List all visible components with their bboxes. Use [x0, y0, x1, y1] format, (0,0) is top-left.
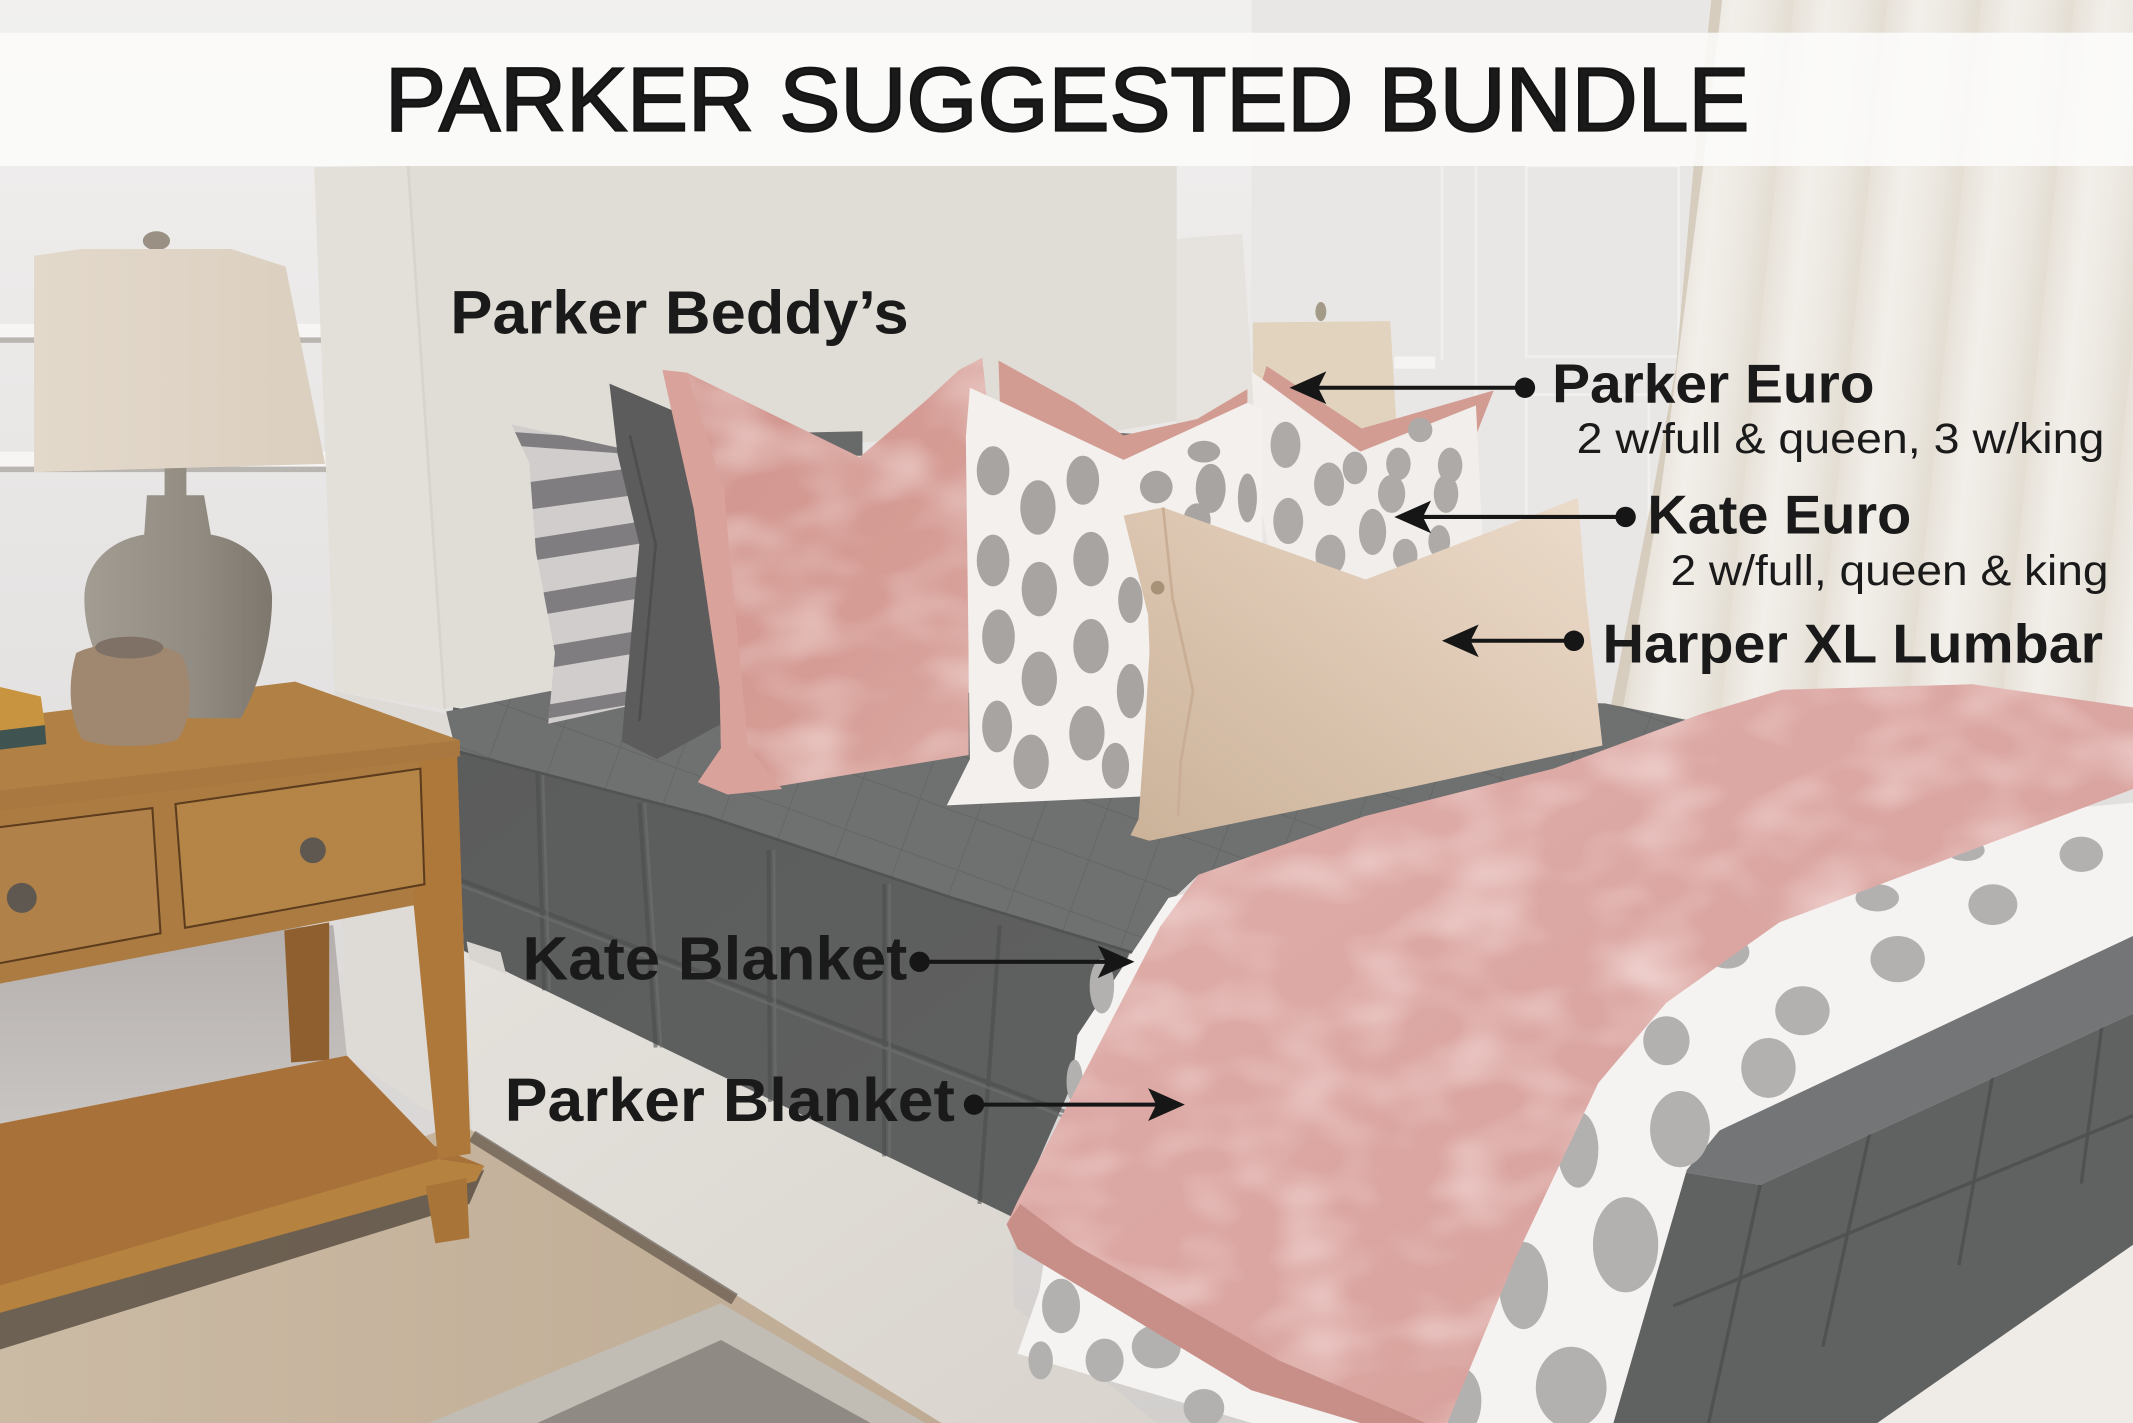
white print pillow left: [947, 361, 1262, 805]
lamp finial: [143, 231, 170, 250]
right drawer: [175, 769, 424, 928]
left drawer: [0, 808, 161, 963]
foot: [426, 1178, 469, 1243]
back leg: [284, 922, 329, 1062]
callout: Parker Blanket: Parker Blanket: [505, 1066, 955, 1134]
knob left: [7, 883, 37, 913]
gray strips behind pillows: [800, 431, 1160, 460]
pink velvet pillow: [662, 358, 988, 794]
gray mattress right: [1613, 925, 2133, 1423]
pillow flange: [662, 370, 782, 794]
callout: Kate Euro: Kate Euro: [1647, 484, 1911, 545]
mattress side (Kate blanket): [453, 707, 1136, 1218]
gray sham: [609, 384, 762, 759]
block print motifs: [1271, 418, 1462, 575]
headboard: [314, 166, 1254, 709]
top blanket: [446, 687, 1739, 954]
shelf shadow on floor: [0, 1170, 484, 1349]
striped pillow: [512, 424, 640, 724]
apron: [0, 752, 457, 984]
callout: Parker Blanket: [505, 1066, 1185, 1134]
wall under drawers: [0, 925, 347, 1124]
pink velvet blanket: [1007, 684, 2133, 1423]
callout: Parker Euro: Parker Euro: [1552, 354, 1875, 415]
wall panels and moulding: [0, 0, 1714, 735]
lower shelf: [0, 1056, 484, 1313]
bed frame side: [335, 691, 2133, 1423]
rug: [429, 1303, 925, 1423]
callout: Parker Euro: 2 w/full & queen, 3 w/king: [1577, 415, 2104, 462]
lamp base: [84, 467, 272, 718]
front leg: [414, 752, 471, 1159]
curtains: [1605, 0, 2133, 735]
knob right: [300, 837, 326, 863]
callout: Harper XL Lumbar: Harper XL Lumbar: [1602, 614, 2103, 675]
pink flange right: [1258, 366, 1494, 463]
blanket print motifs: [1028, 837, 2103, 1423]
white print pillow right: [1252, 366, 1494, 585]
blanket hem: [1007, 1204, 1426, 1423]
candle: [71, 643, 190, 746]
block print motifs: [977, 441, 1257, 789]
lumbar button: [1151, 581, 1164, 595]
table lamp left: [34, 231, 325, 718]
headboard wing: [1177, 234, 1254, 438]
lamp shade: [34, 249, 325, 472]
title band: [0, 33, 2133, 166]
nightstand top: [0, 682, 460, 811]
quilting seams: [461, 769, 1075, 1204]
pink flange left: [998, 361, 1247, 476]
callout: Kate Blanket: [522, 924, 1135, 992]
callout: Kate Blanket: Kate Blanket: [522, 924, 907, 992]
callout: Parker Euro: [1290, 354, 2104, 462]
callout: Kate Euro: [1394, 484, 2109, 594]
Harper XL lumbar pillow: [1124, 498, 1602, 841]
title: PARKER SUGGESTED BUNDLE: [385, 51, 1749, 151]
label: Parker Beddy's: Parker Beddy’s: [450, 278, 909, 346]
floor: [0, 1122, 945, 1423]
white print blanket: [1018, 803, 2133, 1423]
headboard side panel: [314, 166, 443, 709]
gray drape right: [1685, 925, 2133, 1185]
callout: Kate Euro: 2 w/full, queen & king: [1670, 547, 2109, 594]
candle and books: [0, 637, 190, 750]
far table lamp: [1253, 302, 1397, 435]
nightstand: [0, 682, 484, 1349]
books: [0, 687, 45, 731]
